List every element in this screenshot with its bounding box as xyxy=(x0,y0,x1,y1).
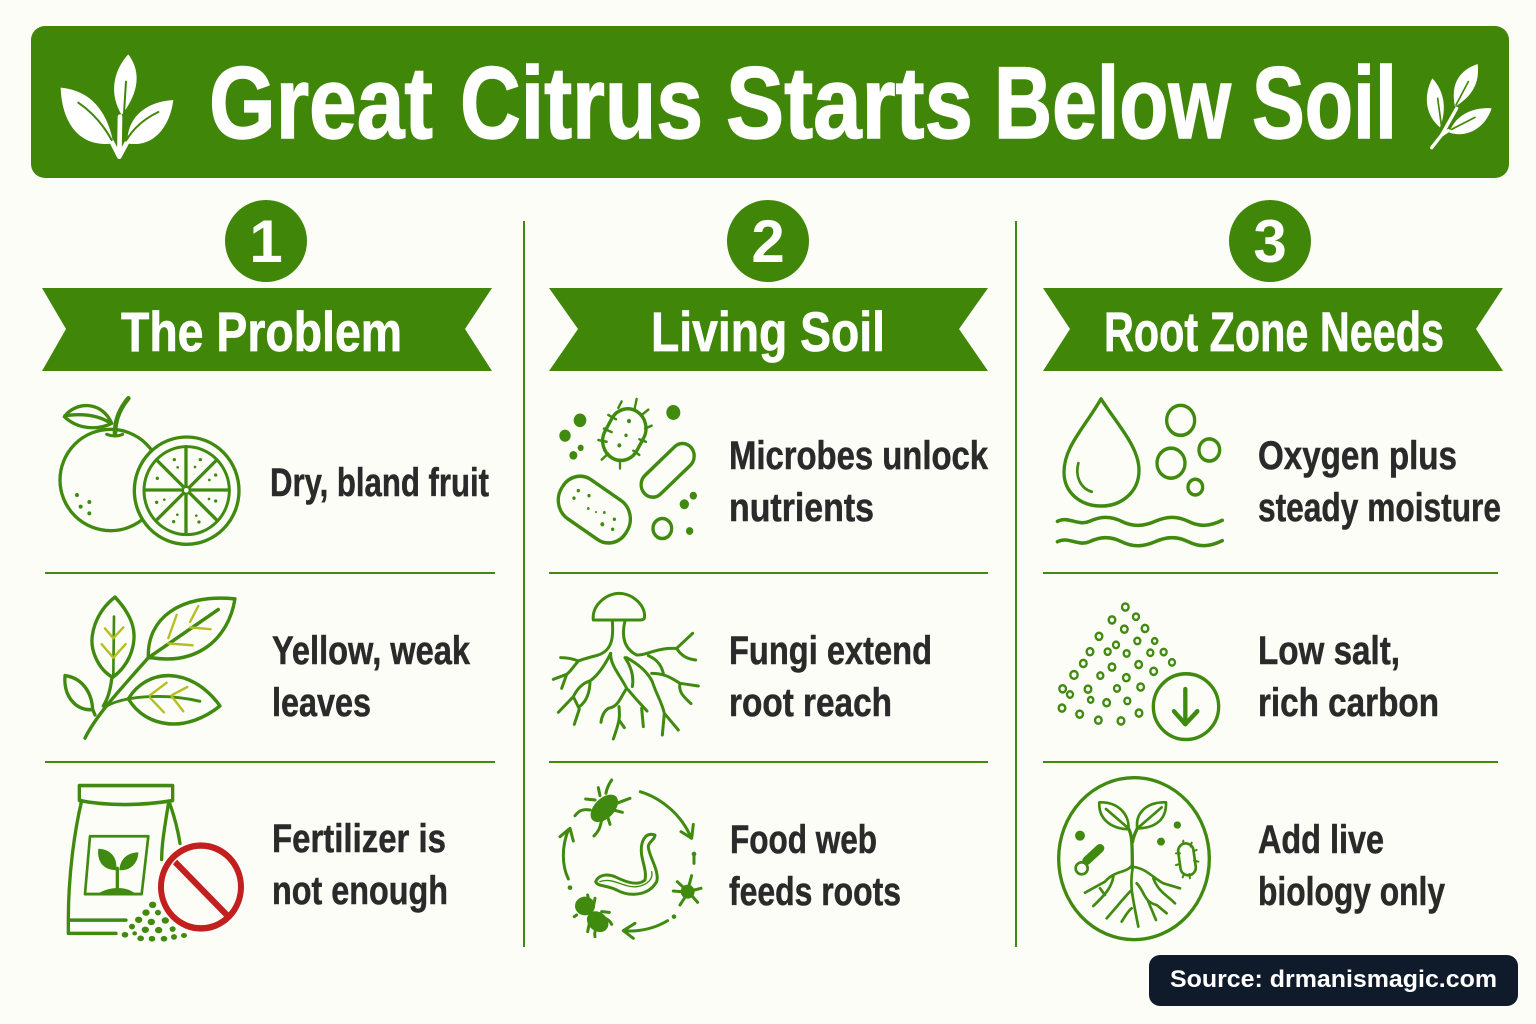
row dividers column 3 xyxy=(1043,572,1498,763)
ribbon heading: Living Soil: Living Soil xyxy=(651,300,885,363)
icon: fertilizer bag with prohibition sign xyxy=(68,786,241,942)
text: Add live biology only: Add live xyxy=(1258,818,1384,862)
text: Dry, bland fruit: Dry, bland fruit xyxy=(270,461,489,505)
text: Fertilizer is not enough: Fertilizer is xyxy=(272,817,446,861)
text: Food web feeds roots: Food web xyxy=(730,818,877,862)
title text xyxy=(209,46,1397,160)
text: Fungi extend root reach xyxy=(729,629,932,725)
text: Microbes unlock nutrients: Microbes unlock xyxy=(729,434,989,478)
ribbon heading: The Problem xyxy=(42,288,492,371)
text: Food web feeds roots xyxy=(729,818,901,914)
number badge 2 xyxy=(727,200,809,282)
panel: column 3 xyxy=(1043,200,1503,940)
icon: right sprig xyxy=(1427,64,1492,148)
text: Fertilizer is not enough: not enough xyxy=(272,869,448,913)
source badge: Source: drmanismagic.com xyxy=(1170,966,1497,993)
text: Microbes unlock nutrients: nutrients xyxy=(729,486,874,530)
source badge xyxy=(1149,955,1518,1006)
ribbon heading: The Problem: The Problem xyxy=(121,300,402,363)
title banner xyxy=(31,26,1509,178)
title text: Below xyxy=(994,46,1232,160)
text: Food web feeds roots: feeds roots xyxy=(729,870,901,914)
title text: Citrus xyxy=(460,46,703,160)
text: Low salt, rich carbon: Low salt, xyxy=(1258,629,1400,673)
text: Microbes unlock nutrients xyxy=(729,434,989,530)
text: Oxygen plus steady moisture: Oxygen plus xyxy=(1258,434,1457,478)
icon: water drop, bubbles and waves xyxy=(1057,399,1222,546)
text: Yellow, weak leaves: leaves xyxy=(272,681,371,725)
text: Yellow, weak leaves xyxy=(272,629,471,725)
text: Low salt, rich carbon xyxy=(1258,629,1439,725)
icon: yellow leaves xyxy=(65,597,235,738)
text: Yellow, weak leaves: Yellow, weak xyxy=(272,629,471,673)
icon: citrus fruit xyxy=(60,398,239,544)
icon: fungi roots xyxy=(553,593,698,739)
row dividers column 1 xyxy=(45,572,495,763)
text: Add live biology only: biology only xyxy=(1258,870,1446,914)
title text: Soil xyxy=(1252,46,1397,160)
text: Oxygen plus steady moisture xyxy=(1258,434,1501,530)
panel: column 1 xyxy=(42,200,495,942)
number badge 3 xyxy=(1229,200,1311,282)
ribbon heading: Living Soil xyxy=(549,288,988,371)
title text: Starts xyxy=(726,46,973,160)
icon: sprout with roots and microbes in circle xyxy=(1059,778,1209,940)
icon: soil food web xyxy=(560,780,701,938)
number badge 1 xyxy=(225,200,307,282)
text: Fungi extend root reach: Fungi extend xyxy=(729,629,932,673)
text: Fungi extend root reach: root reach xyxy=(729,681,892,725)
row dividers column 2 xyxy=(549,572,988,763)
ribbon heading: Root Zone Needs xyxy=(1043,288,1503,371)
number badge 1: 1 xyxy=(249,208,283,275)
number badge 2: 2 xyxy=(751,208,785,275)
column dividers xyxy=(523,221,1017,947)
text: Fertilizer is not enough xyxy=(272,817,448,913)
text: Low salt, rich carbon: rich carbon xyxy=(1258,681,1439,725)
icon: salt pile with down arrow xyxy=(1059,603,1219,740)
title text: Great xyxy=(209,46,433,160)
icon: left leaves xyxy=(61,54,173,157)
text: Add live biology only xyxy=(1258,818,1446,914)
number badge 3: 3 xyxy=(1253,208,1287,275)
panel: column 2 xyxy=(549,200,989,938)
icon: microbes xyxy=(550,399,699,551)
